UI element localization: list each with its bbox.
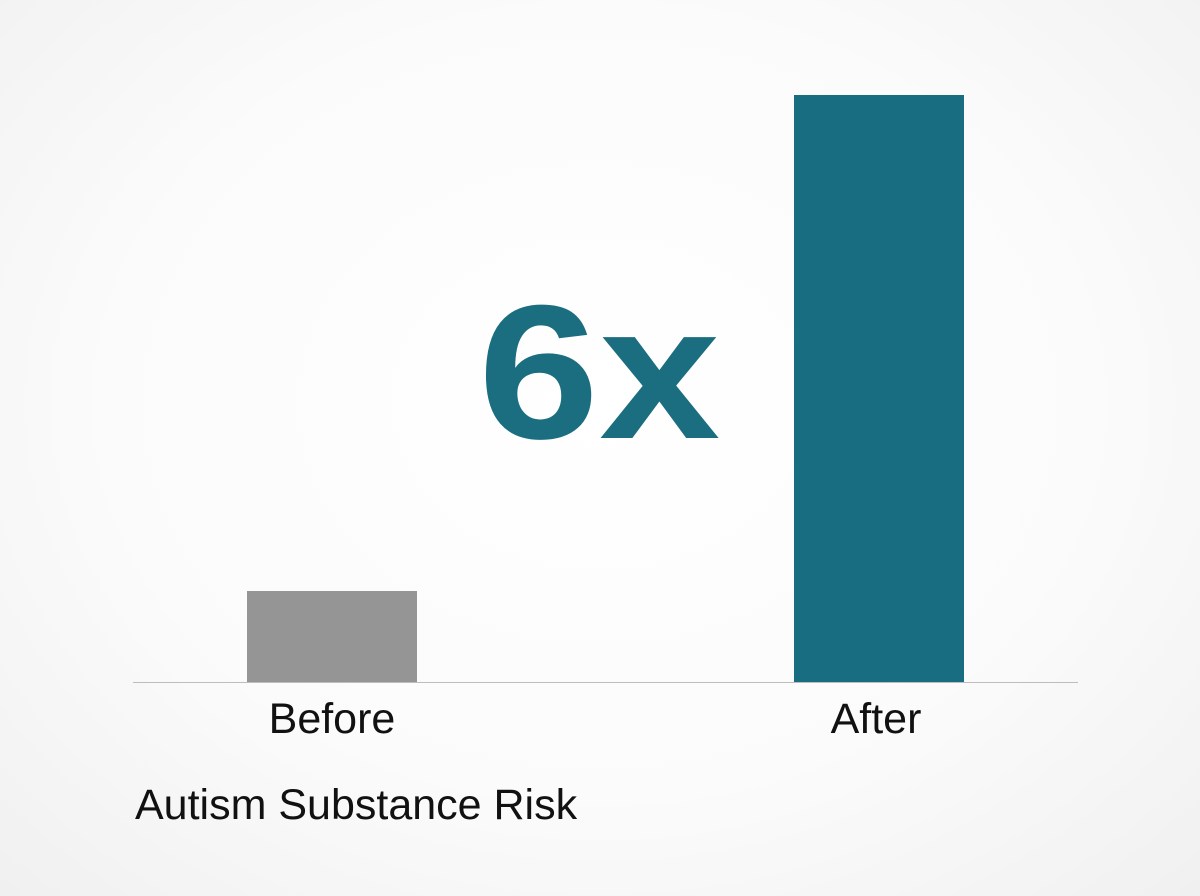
bar: after: [794, 95, 964, 682]
bar chart: [133, 95, 1078, 743]
bar: before: [247, 591, 417, 682]
big number: 6x: 6x: [478, 266, 720, 479]
label: before: Before: [269, 695, 395, 743]
baseline axis: [133, 682, 1078, 683]
chart caption: Autism Substance Risk: [135, 781, 577, 829]
label: after: After: [831, 695, 921, 743]
